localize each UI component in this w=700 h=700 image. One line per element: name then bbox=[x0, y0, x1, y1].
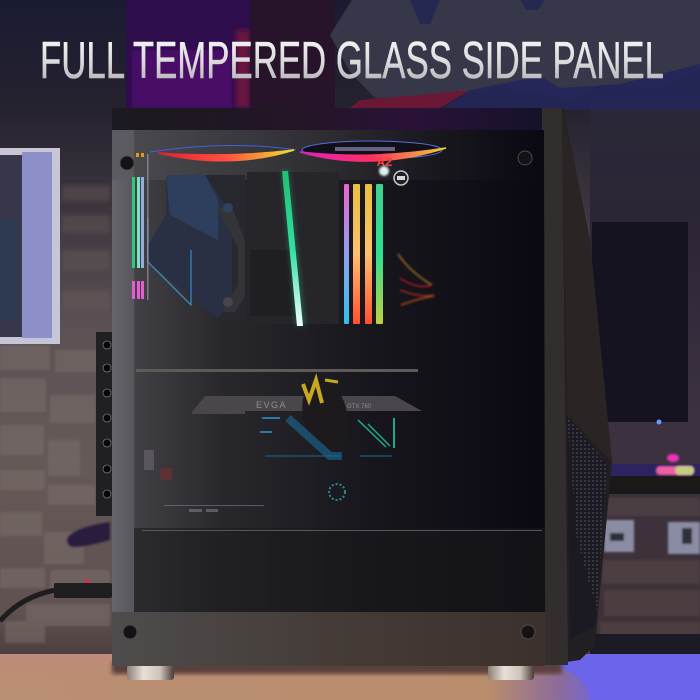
graphics card: GTX 760 bbox=[347, 404, 372, 410]
background: hexagon light panels bbox=[330, 0, 700, 100]
RAM sticks bbox=[344, 184, 383, 324]
case front mesh wing bbox=[540, 108, 612, 665]
graphics card bbox=[136, 369, 422, 414]
case front pillar bbox=[541, 108, 568, 665]
monitor on the right bbox=[592, 222, 688, 424]
power cable and plug bbox=[0, 579, 112, 621]
motherboard lower details bbox=[144, 450, 264, 512]
top fan rings bbox=[150, 141, 446, 161]
case feet bbox=[127, 665, 534, 680]
debug display A2: A2 bbox=[377, 155, 393, 170]
background: right wall bbox=[590, 100, 700, 660]
background: dark maroon band bbox=[250, 0, 335, 108]
rear IO bracket bbox=[96, 332, 114, 516]
background: blue hexagon edge bbox=[440, 64, 700, 110]
graphics card: EVGA bbox=[256, 400, 287, 410]
left RGB rear strips bbox=[132, 153, 148, 300]
dark baseboard bbox=[590, 634, 700, 654]
shadow under the case bbox=[112, 662, 562, 674]
chair behind the case bbox=[67, 522, 110, 547]
teal motherboard traces bbox=[260, 418, 395, 500]
desk lamp glow bbox=[606, 454, 700, 494]
tempered glass side panel bbox=[112, 130, 545, 666]
blue reflection on table bbox=[545, 654, 700, 700]
white LED and button bbox=[379, 166, 408, 185]
table bbox=[0, 654, 700, 700]
side panel screws bbox=[120, 151, 535, 639]
CPU cooler block bbox=[217, 172, 339, 324]
colored power cables bbox=[398, 254, 434, 305]
RGB light strip on cooler bbox=[282, 171, 305, 326]
mouse on the glass reflection bbox=[296, 375, 354, 455]
case top panel bbox=[112, 108, 542, 131]
motherboard IO shroud bbox=[148, 175, 245, 320]
wall bricks right bbox=[600, 498, 700, 636]
background: red glow under hexagons bbox=[350, 90, 470, 108]
background: purple glow column bbox=[126, 0, 250, 108]
outlets on the wall bbox=[604, 520, 700, 554]
picture frame on wall bbox=[0, 148, 60, 344]
